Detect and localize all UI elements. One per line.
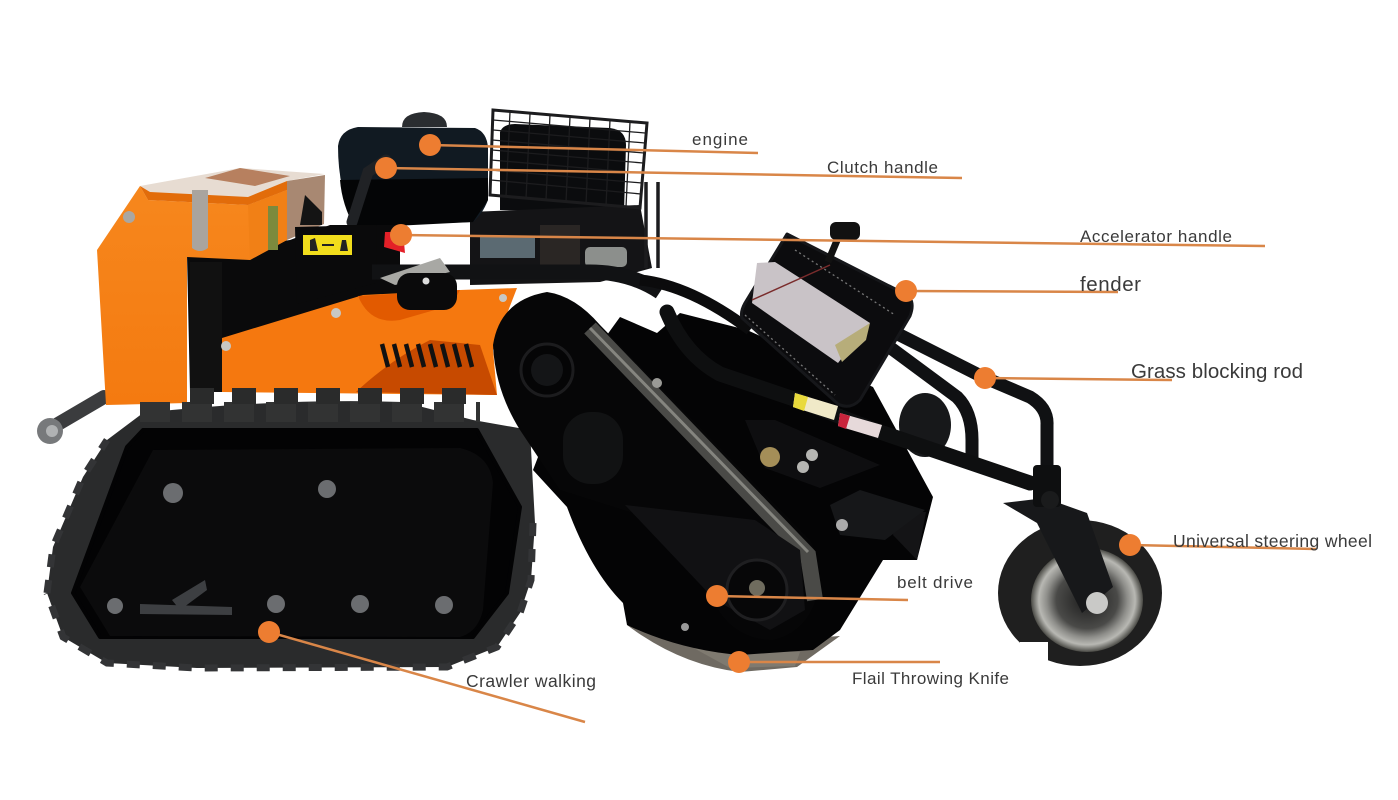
callout: grass blocking rod: Grass blocking rod: [1131, 360, 1303, 383]
callout: crawler walking: Crawler walking: [466, 671, 596, 691]
deck bolts: [652, 378, 848, 631]
fender panel: [741, 222, 912, 406]
callout: universal steering wheel: Universal steering wheel: [1173, 531, 1372, 551]
control handle assembly: [295, 225, 660, 310]
rear wheel behind deck: [899, 393, 951, 457]
machine: tracked flail mower: [37, 110, 1162, 672]
callout: clutch handle: Clutch handle: [827, 158, 938, 177]
antenna: [646, 182, 658, 268]
track bolts: [107, 480, 453, 615]
callout: flail throwing knife: [728, 651, 1009, 688]
belt drive cover: [493, 292, 819, 640]
black side wheel ring: [190, 262, 222, 392]
engine block behind grille: [470, 124, 652, 285]
grass blocking rods: [880, 325, 1047, 465]
callout: universal steering wheel: [1119, 531, 1372, 556]
callout: flail throwing knife: Flail Throwing Knife: [852, 669, 1009, 688]
callout: belt drive: [706, 573, 973, 607]
callout: grass blocking rod: [974, 360, 1303, 389]
callout: fender: [895, 273, 1141, 302]
callout: fender: fender: [1080, 273, 1141, 296]
callout: accelerator handle: [390, 224, 1265, 246]
rear bumper bar: [37, 397, 104, 444]
callout: engine: engine: [692, 130, 748, 149]
orange side body: [221, 288, 517, 395]
callout: belt drive: belt drive: [897, 573, 973, 592]
dark mechanism behind box: [187, 225, 400, 392]
engine guard grille: [490, 110, 647, 208]
callout: engine: [419, 130, 758, 156]
clutch handle: [352, 160, 386, 222]
callout: clutch handle: [375, 157, 962, 179]
callout: accelerator handle: Accelerator handle: [1080, 227, 1232, 246]
crawler track: [47, 396, 535, 668]
main tube with stickers: [640, 280, 1030, 483]
callout: crawler walking: [258, 621, 596, 722]
universal steering wheel: [998, 465, 1162, 670]
mower deck: [533, 313, 933, 672]
vent slots: [382, 344, 472, 367]
fuel tank: [338, 112, 488, 228]
orange control box: [97, 168, 325, 405]
